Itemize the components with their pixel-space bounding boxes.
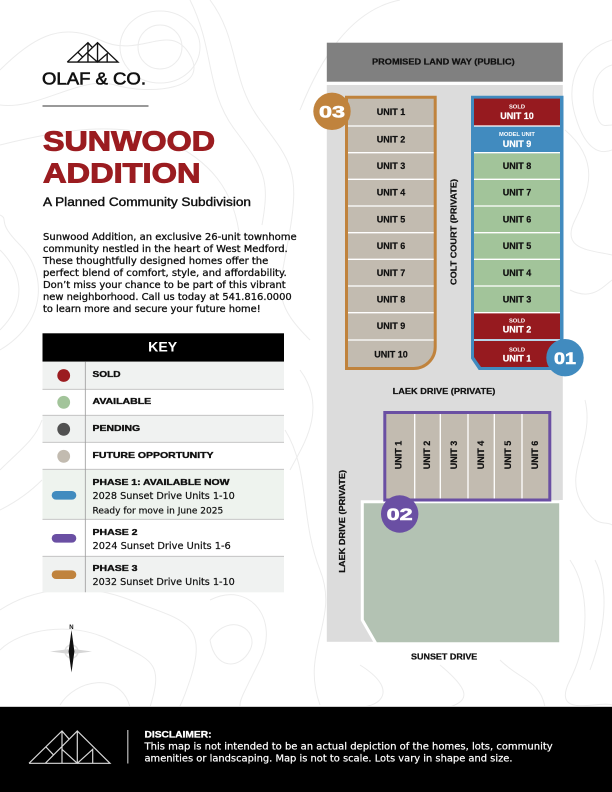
subtitle: A Planned Community Subdivision <box>43 195 251 209</box>
phase 1 unit labels: UNIT 3 <box>503 295 531 305</box>
private roads ground <box>327 85 563 642</box>
road label: Laek Drive horizontal: LAEK DRIVE (PRIVATE) <box>393 386 495 396</box>
phase 3 unit labels: UNIT 6 <box>377 241 405 251</box>
key header: KEY <box>148 340 177 355</box>
title: ADDITION <box>43 157 200 188</box>
badge: phase 01 <box>546 339 584 376</box>
key: sold <box>57 369 120 382</box>
phase 3 unit labels <box>374 107 408 360</box>
intro paragraph: Sunwood Addition, an exclusive 26-unit townhome <box>43 232 297 243</box>
badge: phase 02: 02 <box>387 505 413 524</box>
phase 1 unit labels <box>499 105 535 364</box>
phase 1 unit labels: SOLD <box>509 348 525 354</box>
phase 2 unit labels: UNIT 3 <box>449 441 459 469</box>
phase 1 unit labels: SOLD <box>509 319 525 325</box>
key: phase 3: PHASE 3 <box>92 563 138 573</box>
badge: phase 02 <box>381 495 418 533</box>
disclaimer text: amenities or landscaping. Map is not to scale. Lots vary in shape and size. <box>144 754 512 765</box>
key: phase 1: PHASE 1: AVAILABLE NOW <box>92 477 230 487</box>
phase 3 unit labels: UNIT 4 <box>377 188 405 198</box>
phase 1 unit labels: UNIT 8 <box>503 161 531 171</box>
phase 3 unit labels: UNIT 1 <box>377 107 405 117</box>
phase 1 block <box>472 97 562 368</box>
phase 2 unit labels <box>394 441 540 469</box>
intro paragraph: to learn more and secure your future home! <box>43 304 261 315</box>
phase 3 block <box>346 97 435 368</box>
road label: Colt Court: COLT COURT (PRIVATE) <box>449 179 459 285</box>
phase 1 unit labels: UNIT 1 <box>503 354 531 364</box>
future lot <box>362 502 561 644</box>
key: phase 1: Ready for move in June 2025 <box>92 506 223 516</box>
intro paragraph: Don’t miss your chance to be part of this vibrant <box>43 280 286 291</box>
phase 2 block <box>385 412 550 500</box>
title: SUNWOOD <box>43 126 215 157</box>
key table <box>42 333 284 592</box>
phase 2 unit labels: UNIT 6 <box>530 441 540 469</box>
logo wordmark: OLAF & CO. <box>42 68 146 88</box>
footer band <box>0 706 612 792</box>
key header <box>42 333 284 362</box>
phase 1 unit labels: UNIT 6 <box>503 215 531 225</box>
title <box>43 126 215 188</box>
key: available: AVAILABLE <box>92 396 152 406</box>
key: pending: PENDING <box>92 423 140 433</box>
phase 2 unit labels: UNIT 2 <box>422 441 432 469</box>
logo: Olaf & Co. <box>42 43 146 88</box>
badge: phase 03: 03 <box>319 102 345 121</box>
intro paragraph: These thoughtfully designed homes offer the <box>42 256 268 267</box>
key: phase 2 <box>52 527 231 552</box>
phase 3 unit labels: UNIT 3 <box>377 161 405 171</box>
key: phase 2: 2024 Sunset Drive Units 1-6 <box>92 541 231 552</box>
phase 1 unit labels: UNIT 10 <box>500 111 534 121</box>
key: future opportunity <box>57 450 214 463</box>
phase 3 unit labels: UNIT 2 <box>377 135 405 145</box>
icon: north compass <box>50 625 92 672</box>
footer logo mark <box>29 731 110 763</box>
intro paragraph: perfect blend of comfort, style, and affordability. <box>43 268 287 279</box>
phase 1 unit labels: UNIT 9 <box>503 139 531 149</box>
key: phase 3 <box>52 563 235 588</box>
phase 1 unit labels: UNIT 7 <box>503 188 531 198</box>
logo mark: rooflines <box>67 43 118 62</box>
phase 2 unit labels: UNIT 5 <box>503 441 513 469</box>
phase 3 unit labels: UNIT 8 <box>377 295 405 305</box>
key: phase 1 <box>52 477 235 516</box>
intro paragraph: new neighborhood. Call us today at 541.816.0000 <box>43 292 292 303</box>
road label: Laek Drive vertical: LAEK DRIVE (PRIVATE) <box>337 470 347 573</box>
disclaimer text <box>143 729 553 765</box>
phase 3 unit labels: UNIT 5 <box>377 215 405 225</box>
key: sold: SOLD <box>92 369 120 379</box>
key: phase 3: 2032 Sunset Drive Units 1-10 <box>92 577 235 588</box>
phase 1 unit labels: UNIT 4 <box>503 268 531 278</box>
intro paragraph: community nestled in the heart of West Medford. <box>43 244 288 255</box>
badge: phase 03 <box>313 93 351 130</box>
disclaimer text: DISCLAIMER: <box>144 729 212 739</box>
phase 3 unit labels: UNIT 9 <box>377 321 405 331</box>
road: Promised Land Way <box>327 43 563 82</box>
site map <box>313 43 584 662</box>
phase 2 unit labels: UNIT 4 <box>476 441 486 469</box>
key: phase 1: 2028 Sunset Drive Units 1-10 <box>92 491 235 502</box>
phase 2 unit labels: UNIT 1 <box>394 441 404 469</box>
road: Promised Land Way: PROMISED LAND WAY (PUBLIC) <box>372 57 515 67</box>
phase 3 unit labels: UNIT 7 <box>377 268 405 278</box>
key: available <box>57 396 152 409</box>
phase 3 unit labels: UNIT 10 <box>374 350 408 360</box>
key: future opportunity: FUTURE OPPORTUNITY <box>92 450 214 460</box>
phase 1 unit labels: UNIT 5 <box>503 241 531 251</box>
badge: phase 01: 01 <box>554 349 576 368</box>
phase 1 unit labels: SOLD <box>509 105 525 111</box>
road label: Sunset Drive: SUNSET DRIVE <box>411 652 478 662</box>
disclaimer text: This map is not intended to be an actual depiction of the homes, lots, community <box>143 742 553 752</box>
intro paragraph <box>42 232 297 315</box>
icon: north compass: N <box>69 625 74 631</box>
key: phase 2: PHASE 2 <box>92 527 138 537</box>
phase 1 unit labels: UNIT 2 <box>503 325 531 335</box>
key: pending <box>57 423 140 436</box>
phase 1 unit labels: MODEL UNIT <box>499 132 535 138</box>
